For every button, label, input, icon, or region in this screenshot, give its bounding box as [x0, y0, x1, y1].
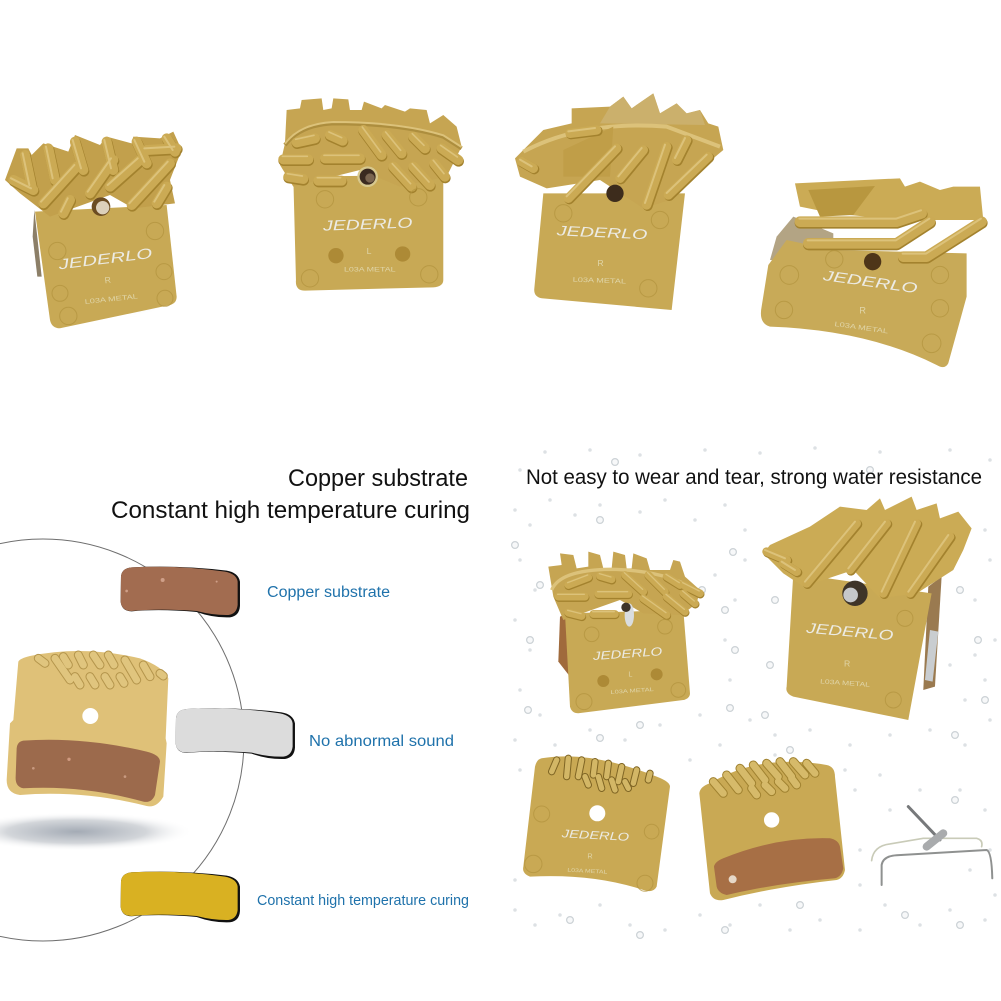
pad 3 with heat-sink fins: L03A METAL: [573, 277, 627, 286]
spring clip and pin: [872, 807, 992, 885]
panel: water resistance photo: [510, 445, 1001, 941]
layer: cured adhesive: [121, 872, 240, 922]
pad 4 angled with swept fins: JEDERLO: [821, 268, 918, 297]
pad D, friction side view: [699, 762, 845, 900]
pad 2 with heat-sink fins: L: [367, 246, 372, 256]
pad C, back plate view: L03A METAL: [567, 868, 608, 876]
pad C, back plate view: [523, 756, 670, 891]
circle outline linking layers: [0, 539, 244, 941]
pad 1 with heat-sink fins: JEDERLO: [56, 246, 153, 273]
pad 3 with heat-sink fins: R: [597, 258, 604, 268]
pad 3 with heat-sink fins: [515, 93, 723, 310]
pad 4 angled with swept fins: L03A METAL: [834, 321, 889, 336]
pad 2 with heat-sink fins: L03A METAL: [344, 266, 396, 273]
layer: copper substrate: [121, 567, 240, 617]
pad A, wet: JEDERLO: [591, 645, 663, 663]
floor shadow: [0, 812, 193, 851]
label: no abnormal sound: No abnormal sound: [309, 733, 454, 750]
layer: noise-damping shim: [176, 708, 295, 759]
pad 1 with heat-sink fins: [5, 132, 182, 328]
pad A, wet: L: [628, 670, 632, 679]
pad B, wet: R: [844, 659, 850, 669]
pad A, wet: [548, 552, 700, 713]
heading: copper substrate: Copper substrate: [288, 465, 468, 492]
pad B, wet: L03A METAL: [820, 678, 871, 689]
pad B, wet: JEDERLO: [804, 621, 894, 644]
pad A, wet: L03A METAL: [610, 687, 654, 696]
label: copper substrate: Copper substrate: [267, 584, 390, 601]
pad 3 with heat-sink fins: JEDERLO: [555, 222, 648, 242]
pad 1 with heat-sink fins: R: [104, 275, 111, 285]
label: constant high temperature curing: Constant high temperature curing: [257, 893, 469, 909]
pad B, wet: [763, 497, 972, 720]
panel: exploded layer diagram: [0, 567, 295, 922]
pad 1 with heat-sink fins: L03A METAL: [84, 293, 139, 306]
pad 2 with heat-sink fins: [280, 98, 462, 291]
pad C, back plate view: R: [587, 851, 593, 860]
backing plate with friction pad: [7, 651, 168, 806]
water droplet background: [510, 445, 1001, 941]
heading: constant high temperature curing: Constant high temperature curing: [111, 497, 470, 524]
pad 4 angled with swept fins: [761, 178, 983, 367]
pad 4 angled with swept fins: R: [859, 305, 866, 315]
pad C, back plate view: JEDERLO: [560, 828, 630, 844]
pad 2 with heat-sink fins: JEDERLO: [322, 216, 413, 235]
panel: top product photo: [5, 93, 983, 367]
heading: water resistance: Not easy to wear and tear, strong water resistance: [526, 466, 982, 489]
